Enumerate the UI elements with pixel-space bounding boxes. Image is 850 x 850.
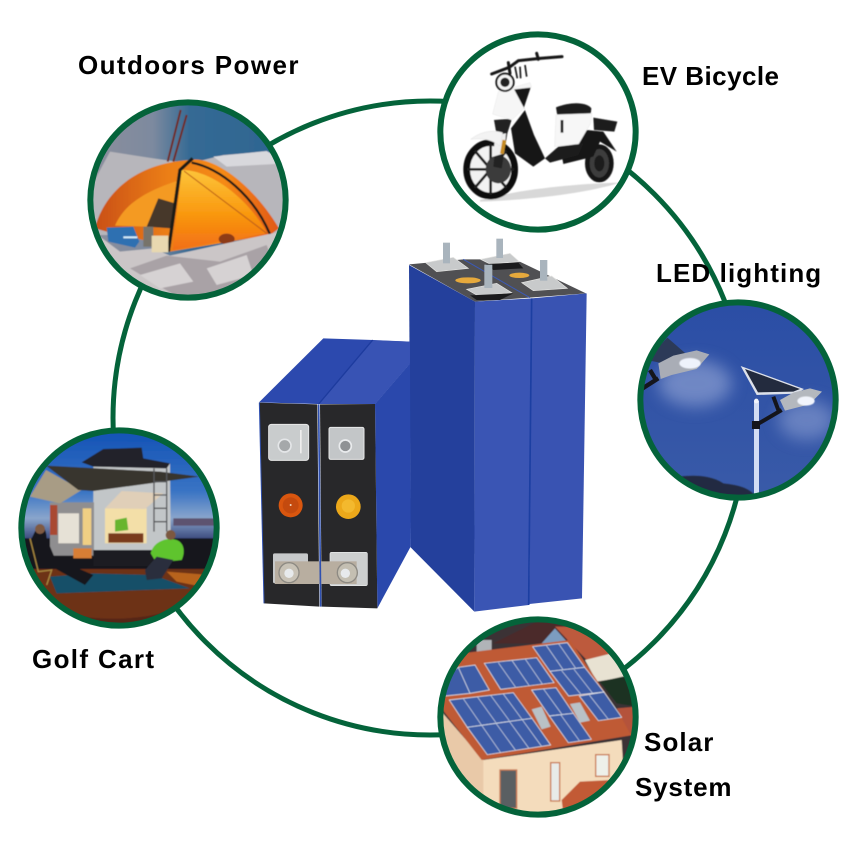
icon: chimney [477,640,492,652]
icon: blue rug [50,573,190,593]
panel: outdoors power circle [87,99,289,301]
icon: RV body [93,462,171,557]
heading: LED lighting: LED lighting [656,258,822,288]
icon: fork [493,119,512,168]
icon: upper terminal left [269,424,309,460]
panel: golf cart / RV circle [18,427,220,629]
icon: flat battery side [375,363,411,608]
icon: light glow right [778,400,835,440]
icon: black frame [511,87,545,167]
icon: handlebars [492,53,562,74]
icon: house windows [500,770,517,808]
panel: solar system circle [437,616,639,818]
icon: house wall [440,710,627,823]
icon: left solar street lamp [640,338,709,390]
icon: skylights [532,707,551,729]
icon: lit window [105,508,147,543]
icon: snow ground [100,232,276,294]
heading: Golf Cart: Golf Cart [32,644,155,674]
icon: lamp head [780,388,822,411]
icon: upright battery side [409,265,475,612]
icon: ground shadow [480,183,620,202]
icon: light glow left [658,360,732,407]
icon: flat battery top faces [259,338,410,404]
icon: seat and white body [556,103,591,116]
icon: orange vent [279,493,303,517]
icon: top terminals [426,239,567,300]
icon: awning underside [30,470,82,503]
icon: pole [754,401,759,498]
heading: Solar: Solar [644,727,715,757]
icon: solar panels [440,643,622,755]
icon: headlight [496,74,514,91]
icon: lamp arm [755,397,782,426]
icon: upright battery fronts [474,293,587,612]
icon: upright battery top [409,259,586,302]
icon: awning top [46,466,199,491]
icon: tiled roof [440,640,633,760]
icon: solar panel [741,366,804,395]
icon: ground [34,568,204,620]
icon: fender [471,131,503,146]
icon: panel cell lines [463,643,608,753]
icon: yellow vent [336,494,361,519]
icon: ski poles [168,110,187,162]
icon: person right [151,539,184,563]
icon: person left [32,524,93,585]
icon: blue generator [107,227,139,248]
icon: snow mountains [87,152,290,235]
icon: rear rack and fender [593,118,617,132]
icon: upper terminal right [329,427,364,459]
panel: central LiFePO4 batteries [259,239,587,612]
icon: trees [682,475,754,495]
heading: EV Bicycle: EV Bicycle [642,61,779,91]
icon: front wheel [467,143,515,196]
icon: white front shield [493,83,532,120]
panel: EV bicycle circle [438,32,638,232]
panel: LED lighting circle [637,299,839,501]
heading: Outdoors Power: Outdoors Power [78,50,300,80]
icon: bottom terminals and busbar [273,552,367,586]
icon: neighbour roof [555,627,610,660]
icon: flat battery black faces [259,403,377,608]
heading: System: System [635,772,732,802]
icon: orange tent [95,159,279,252]
icon: ladder [154,468,167,532]
connecting ring [113,101,747,735]
icon: floorboard [544,144,572,164]
icon: rear wheel [587,147,611,180]
icon: side door [58,513,79,543]
